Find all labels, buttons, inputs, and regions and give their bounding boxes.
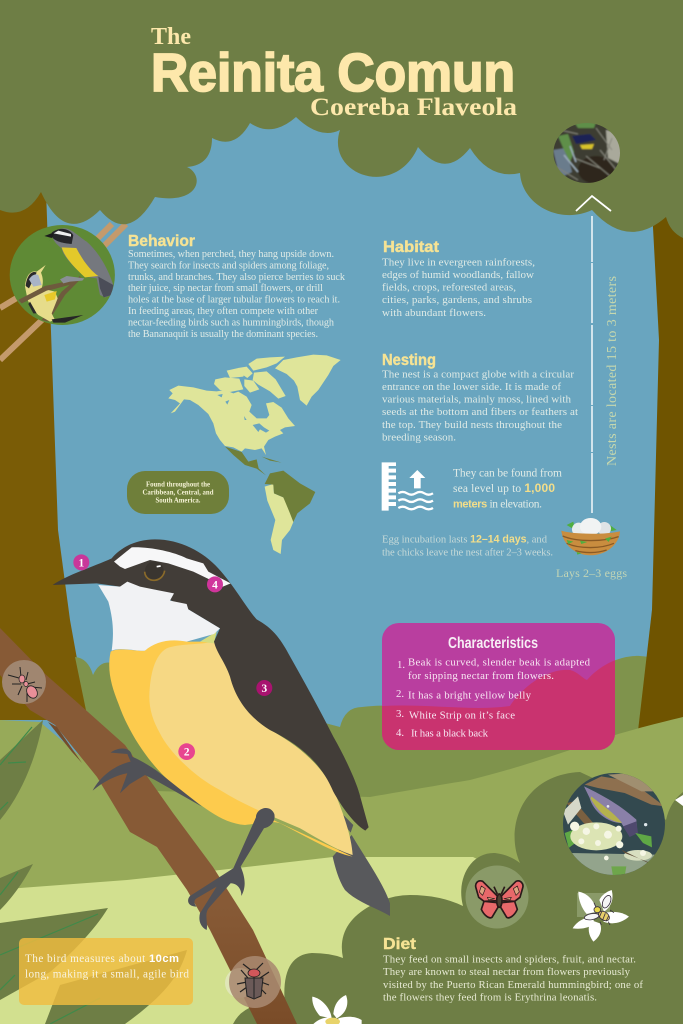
nest height label: Nests are located 15 to 3 meters [605,276,620,466]
characteristics list [396,656,591,740]
behavior section [10,225,346,340]
behavior text: trunks, and branches. They also pierce berries to suck [128,272,346,283]
title: Coereba Flaveola [310,94,518,121]
habitat heading: Habitat [383,239,440,256]
photo: nest with bird [554,123,620,183]
diet text: They feed on small insects and spiders, fruit, and nectar. [383,954,636,966]
panel: characteristics [382,623,615,750]
badge 3 [256,680,272,696]
incubation text [382,534,553,558]
eggs label: Lays 2–3 eggs [556,566,627,580]
behavior text: the Bananaquit is usually the dominant species. [128,329,318,340]
nesting text [382,368,578,444]
behavior photo [10,225,115,325]
badge 3: 3 [261,683,267,695]
diet heading: Diet [383,936,417,953]
icon: bee on flower [573,890,629,942]
undertail [342,813,353,833]
far hills [75,656,683,900]
badge 2 [178,743,195,760]
callout: range: South America. [156,498,201,504]
habitat text: They live in evergreen rainforests, [382,256,535,268]
bird [584,786,637,826]
north america [168,386,295,455]
nesting text: seeds at the bottom and fibers or feathers at [382,406,578,418]
behavior text: holes at the base of larger tubular flowers to reach it. [128,295,340,306]
lower bird [25,265,58,322]
great lakes [253,423,269,433]
badge 2: 2 [184,747,190,759]
greenland [275,355,341,406]
callout: size: The bird measures about 10cm [25,953,179,965]
back and head [53,539,369,831]
incubation text: the chicks leave the nest after 2–3 weeks. [382,548,553,558]
icon: flower at bottom [312,995,362,1024]
bottom blur [572,853,654,875]
behavior text: They search for insects and spiders among foliage, [128,260,329,271]
badge 1 [73,554,89,570]
nesting text: the top. They build nests throughout the [382,419,562,431]
leaves [565,830,575,848]
behavior text: nectar-feeding birds such as hummingbirds, though [128,317,334,328]
nesting text: entrance on the lower side. It is made of [382,381,561,393]
behavior heading: Behavior [128,233,195,250]
leaves at lower left [0,720,187,1024]
habitat text: with abundant flowers. [382,307,486,319]
badge 4 [207,576,223,592]
behavior text: their juice, sip nectar from small flowers, or drill [128,283,323,294]
characteristics list: Beak is curved, slender beak is adapted [408,656,591,668]
characteristics heading: Characteristics [448,635,538,652]
characteristics list: It has a bright yellow belly [408,690,532,702]
range: northern south america [265,471,315,522]
left tree trunk [0,190,88,720]
background twigs [0,224,126,360]
twig [18,280,75,303]
title [151,24,518,121]
upper bird [52,228,113,297]
title: The [151,24,191,50]
icon: nest with eggs [561,518,620,555]
elevation text: They can be found from [453,468,562,480]
white face stripe [114,547,231,591]
diet text: visited by the Puerto Rican Emerald hummingbird; one of [383,979,643,991]
nesting heading: Nesting [382,352,436,369]
flowers [570,822,622,850]
callout: range: Caribbean, Central, and [142,490,214,496]
elevation text [453,468,562,510]
icon: butterfly [466,866,528,928]
icon: elevation [382,462,433,511]
characteristics list: for sipping nectar from flowers. [408,670,554,682]
shoulder tint [200,632,217,643]
branch [0,628,297,1024]
white petal at right edge [675,795,683,806]
habitat text [382,256,535,319]
callout: size: long, making it a small, agile bird [25,968,189,980]
branches [585,776,665,806]
incubation text: Egg incubation lasts 12–14 days, and [382,534,548,546]
body [497,894,502,907]
elevation text: sea level up to 1,000 [453,481,555,495]
badge 4: 4 [212,579,218,591]
petals [573,890,629,942]
arrow: nest height [576,196,611,513]
left wings [476,881,497,901]
photo: bird feeding on flowers [563,773,665,878]
right tree trunk, lower part [638,610,683,731]
ant badge [2,660,46,704]
behavior text: In feeding areas, they often compete with other [128,306,319,317]
eye [145,561,165,580]
badge 1: 1 [78,557,84,569]
range: mexico and central america [225,447,266,475]
far leg [188,808,275,930]
right wings [501,881,523,901]
characteristics list: 2. [396,688,404,700]
white throat [98,582,220,651]
diet text: the flowers they feed from is Erythrina leonatis. [383,992,597,1004]
bottom right mound [233,772,683,1024]
diet text [383,954,643,1004]
characteristics list: 3. [396,708,404,720]
arctic islands [214,357,286,399]
callout: size [19,938,193,1005]
behavior text [128,249,346,340]
near foot [93,749,202,807]
yellow belly [109,640,353,857]
mid field [0,717,683,1024]
nesting section [382,352,578,444]
habitat text: edges of humid woodlands, fallow [382,269,534,281]
habitat section [382,239,535,319]
habitat text: cities, parks, gardens, and shrubs [382,294,532,306]
characteristics list: White Strip on it’s face [409,710,515,722]
elevation text: meters in elevation. [453,498,542,510]
wing panel [149,642,353,855]
characteristics list: It has a black back [411,728,489,740]
diet text: They are known to steal nectar from flowers previously [383,966,631,978]
tree canopy [0,0,683,238]
wing patches [479,886,519,900]
behavior text: Sometimes, when perched, they hang upside down. [128,249,334,260]
characteristics list: 1. [397,659,405,671]
branch shadow [48,722,82,763]
title: Reinita Comun [151,43,515,103]
nesting text: The nest is a compact globe with a circular [382,368,574,380]
right tree trunk, upper part [651,190,683,640]
beetle badge [225,956,281,1008]
characteristics list: 4. [396,727,404,739]
lakes west [217,394,247,420]
habitat text: fields, crops, reforested areas, [382,282,516,294]
south america [265,484,295,554]
diet section [383,936,643,1004]
range: caribbean [262,457,282,463]
world map: the Americas [168,355,341,554]
bird illustration [53,539,390,930]
bee [584,894,614,925]
pale field [0,857,683,1024]
nesting text: breeding season. [382,432,456,444]
tail [333,835,390,916]
callout: range: Found throughout the [146,482,210,488]
callout: range [127,471,229,514]
nesting text: various materials, mainly moss, lined with [382,394,572,406]
